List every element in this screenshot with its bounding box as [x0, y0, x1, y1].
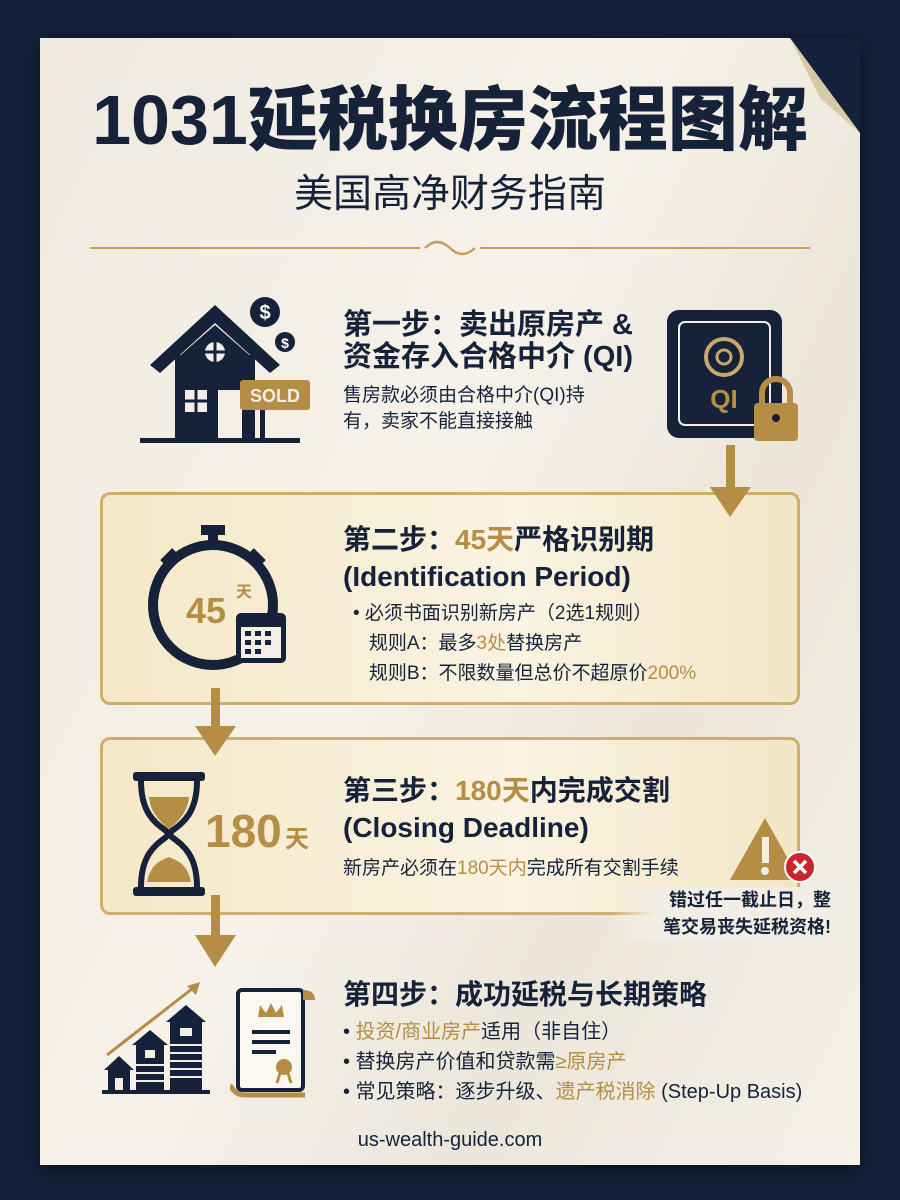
step 4 heading: 第四步：成功延税与长期策略 — [343, 979, 707, 1010]
warning text: 错过任一截止日，整 — [669, 890, 831, 910]
icon: stopwatch 45 days: 45 — [186, 590, 226, 631]
step 3 heading: 第三步：180天内完成交割 — [343, 775, 670, 806]
step 1 — [140, 297, 798, 443]
arrow: step1 to step2 — [710, 445, 751, 517]
step 4 bullets — [343, 1021, 802, 1103]
icon: QI safe — [667, 310, 798, 441]
step 3 description: 新房产必须在180天内完成所有交割手续 — [343, 858, 679, 879]
warning text: 笔交易丧失延税资格! — [663, 917, 831, 937]
title: 1031延税换房流程图解 — [92, 81, 808, 159]
step 1 heading: 第一步：卖出原房产 & — [343, 309, 633, 341]
icon: growth houses — [102, 982, 210, 1094]
step 1 heading: 资金存入合格中介 (QI) — [343, 341, 633, 373]
step 4 bullets: • 投资/商业房产适用（非自住） — [343, 1021, 621, 1043]
icon: sold house: $ — [259, 302, 271, 324]
step 2 bullets: 规则B：不限数量但总价不超原价200% — [369, 663, 696, 684]
icon: sold house: SOLD — [250, 386, 300, 406]
warning text — [610, 887, 835, 941]
step 2 bullets: • 必须书面识别新房产（2选1规则） — [353, 603, 652, 624]
icon: hourglass 180 days — [133, 772, 309, 896]
icon: certificate — [230, 988, 315, 1098]
panel: step 3 — [100, 737, 800, 915]
step 2 bullets — [353, 602, 696, 684]
step 4 bullets: • 替换房产价值和贷款需≥原房产 — [343, 1051, 627, 1073]
icon: sold house — [140, 297, 310, 443]
step 1 description: 售房款必须由合格中介(QI)持 — [343, 385, 585, 406]
icon: stopwatch 45 days: 天 — [236, 584, 252, 601]
panel: step 2 — [100, 492, 800, 705]
callout: deadline warning — [613, 818, 831, 937]
step 3 heading — [343, 775, 670, 843]
step 2 bullets: 规则A：最多3处替换房产 — [369, 633, 582, 654]
footer url: us-wealth-guide.com — [358, 1129, 542, 1151]
step 2 heading: 第二步：45天严格识别期 — [343, 524, 654, 555]
icon: QI safe: QI — [710, 384, 738, 414]
icon: warning with x — [730, 818, 816, 883]
divider ornament — [90, 240, 810, 256]
step 2 heading: (Identification Period) — [343, 561, 631, 592]
icon: hourglass 180 days: 天 — [285, 826, 309, 853]
arrow: step3 to step4 — [195, 895, 236, 967]
step 1 description — [343, 385, 585, 432]
step 1 description: 有，卖家不能直接接触 — [343, 411, 533, 432]
icon: sold house: $ — [281, 335, 289, 351]
arrow: step2 to step3 — [195, 688, 236, 756]
icon: stopwatch 45 days — [148, 525, 286, 670]
step 3 heading: (Closing Deadline) — [343, 812, 589, 843]
subtitle: 美国高净财务指南 — [294, 173, 606, 216]
icon: hourglass 180 days: 180 — [205, 805, 282, 857]
step 4 bullets: • 常见策略：逐步升级、遗产税消除 (Step-Up Basis) — [343, 1081, 802, 1103]
folded corner — [790, 38, 860, 133]
step 4 — [102, 979, 802, 1103]
step 2 heading — [343, 524, 654, 592]
step 1 heading — [343, 308, 633, 373]
